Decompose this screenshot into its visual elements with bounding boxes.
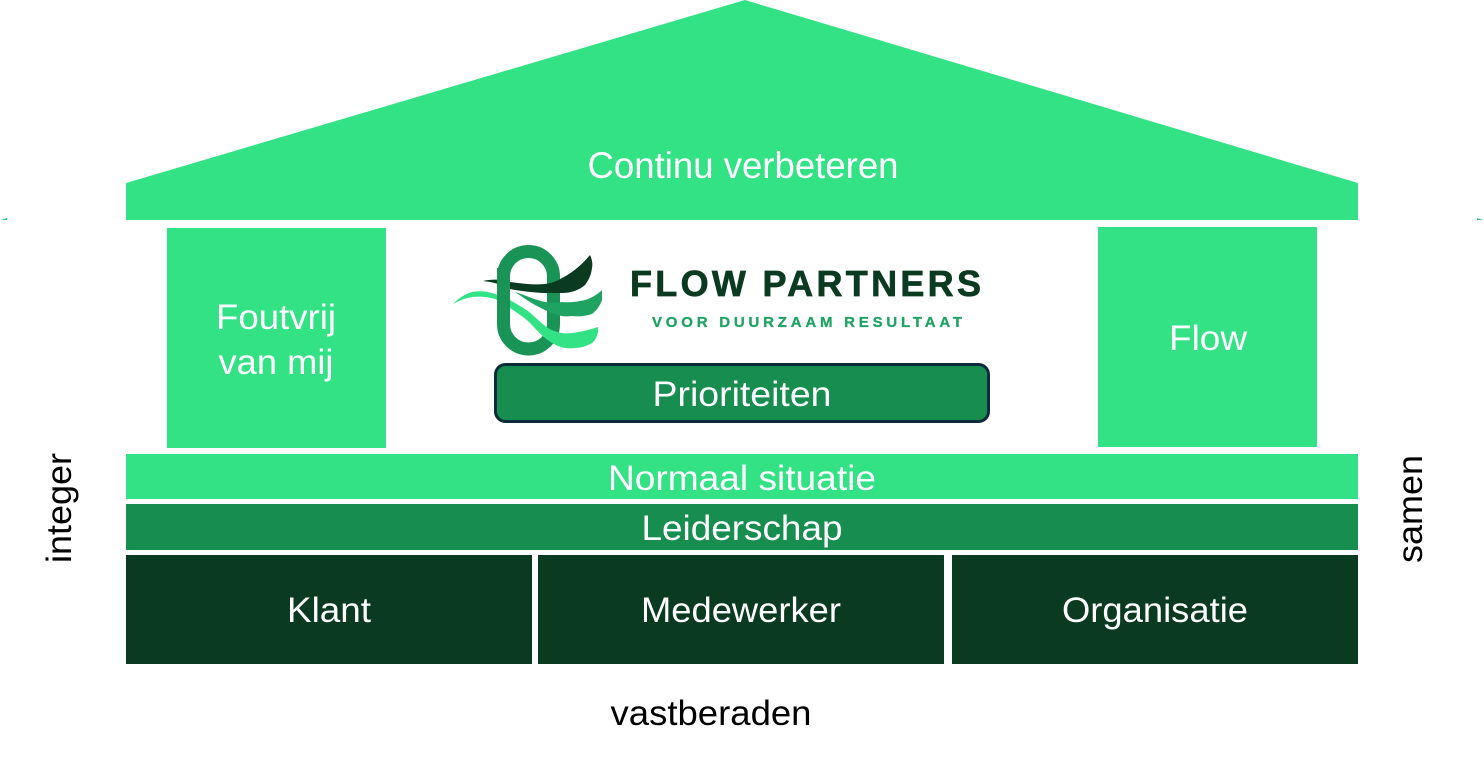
pillar: flow: Flow xyxy=(1169,319,1248,358)
foundation: klant: Klant xyxy=(287,591,371,630)
roof: continu verbeteren: Continu verbeteren xyxy=(588,145,898,186)
label: vastberaden: vastberaden xyxy=(610,694,812,733)
foundation: organisatie: Organisatie xyxy=(1062,591,1248,630)
foundation: medewerker: Medewerker xyxy=(641,591,841,630)
logo: flow partners xyxy=(453,252,981,349)
foundation: organisatie xyxy=(952,555,1358,664)
pillar: foutvrij van mij: Foutvrij xyxy=(216,298,336,337)
icon: logo ring and swooshes xyxy=(453,252,602,349)
label: integer: integer xyxy=(40,453,79,563)
foundation: klant xyxy=(126,555,532,664)
roof: continu verbeteren xyxy=(126,0,1358,220)
band: leiderschap xyxy=(126,504,1358,550)
pillar: foutvrij van mij: van mij xyxy=(218,343,334,382)
pillar: foutvrij van mij xyxy=(167,228,386,448)
band: normaal situatie xyxy=(126,454,1358,499)
band: normaal situatie: Normaal situatie xyxy=(608,459,876,498)
button: prioriteiten xyxy=(496,364,988,422)
pillar: flow xyxy=(1098,227,1317,447)
logo tagline: VOOR DUURZAAM RESULTAAT xyxy=(652,314,962,331)
band: leiderschap: Leiderschap xyxy=(642,509,842,548)
label: samen: samen xyxy=(1391,455,1430,563)
left edge mark xyxy=(1,218,7,220)
button: prioriteiten: Prioriteiten xyxy=(652,375,832,414)
right edge mark xyxy=(1477,218,1483,220)
logo name: FLOW PARTNERS xyxy=(630,263,981,304)
foundation: medewerker xyxy=(538,555,944,664)
